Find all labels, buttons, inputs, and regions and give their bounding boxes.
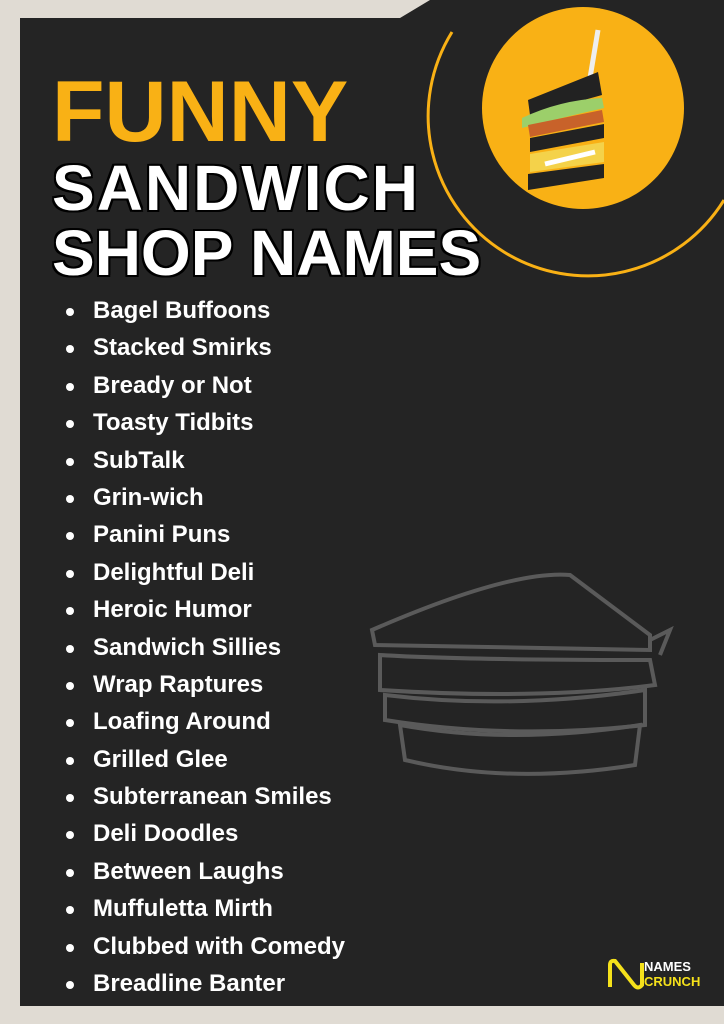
text: SHOP NAMES (52, 217, 481, 289)
name list: Sandwich Sillies (93, 634, 281, 661)
title (52, 64, 481, 289)
name list: Breadline Banter (93, 970, 285, 997)
logo: names crunch: CRUNCH (644, 974, 700, 989)
name list: Bagel Buffoons (93, 297, 270, 324)
illustration: circle with club sandwich (426, 7, 724, 278)
name list: Grilled Glee (93, 746, 228, 773)
name list: Loafing Around (93, 708, 271, 735)
name list: Delightful Deli (93, 559, 254, 586)
name list: Deli Doodles (93, 820, 238, 847)
text: FUNNY (52, 64, 348, 160)
name list: Wrap Raptures (93, 671, 263, 698)
name list: Stacked Smirks (93, 334, 272, 361)
name list: Between Laughs (93, 858, 284, 885)
icon: sandwich outline (370, 572, 674, 776)
name list: SubTalk (93, 447, 185, 474)
name list: Grin-wich (93, 484, 204, 511)
name list: Heroic Humor (93, 596, 252, 623)
name list (66, 297, 345, 997)
name list: Bready or Not (93, 372, 252, 399)
text: SANDWICH (52, 152, 420, 224)
name list: Toasty Tidbits (93, 409, 253, 436)
logo: names crunch: NAMES (644, 959, 691, 974)
name list: Subterranean Smiles (93, 783, 332, 810)
name list: Clubbed with Comedy (93, 933, 345, 960)
name list: Panini Puns (93, 521, 230, 548)
logo: names crunch (608, 958, 700, 990)
name list: Muffuletta Mirth (93, 895, 273, 922)
